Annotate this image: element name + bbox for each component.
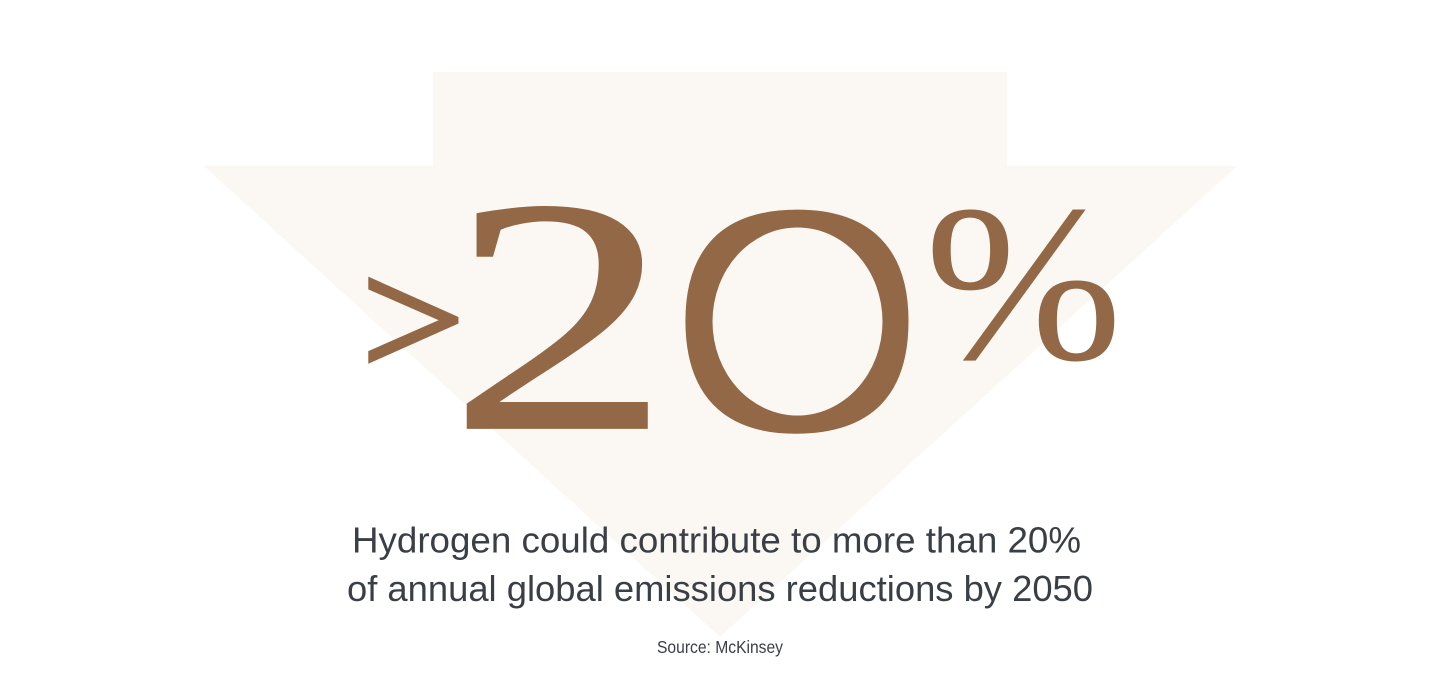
big statistic: more than 20 percent xyxy=(361,131,1122,501)
big statistic: more than 20 percent: > xyxy=(361,228,465,413)
big statistic: more than 20 percent: 0 xyxy=(671,140,923,498)
big statistic: more than 20 percent: 2 xyxy=(448,131,671,501)
description text: Hydrogen could contribute to more than 20% xyxy=(352,520,1081,560)
big statistic: more than 20 percent: % xyxy=(925,159,1122,407)
description text xyxy=(347,520,1093,609)
description text: of annual global emissions reductions by 2050 xyxy=(347,568,1093,609)
icon: large down arrow background xyxy=(204,72,1237,637)
source note: Source: McKinsey xyxy=(657,637,783,657)
